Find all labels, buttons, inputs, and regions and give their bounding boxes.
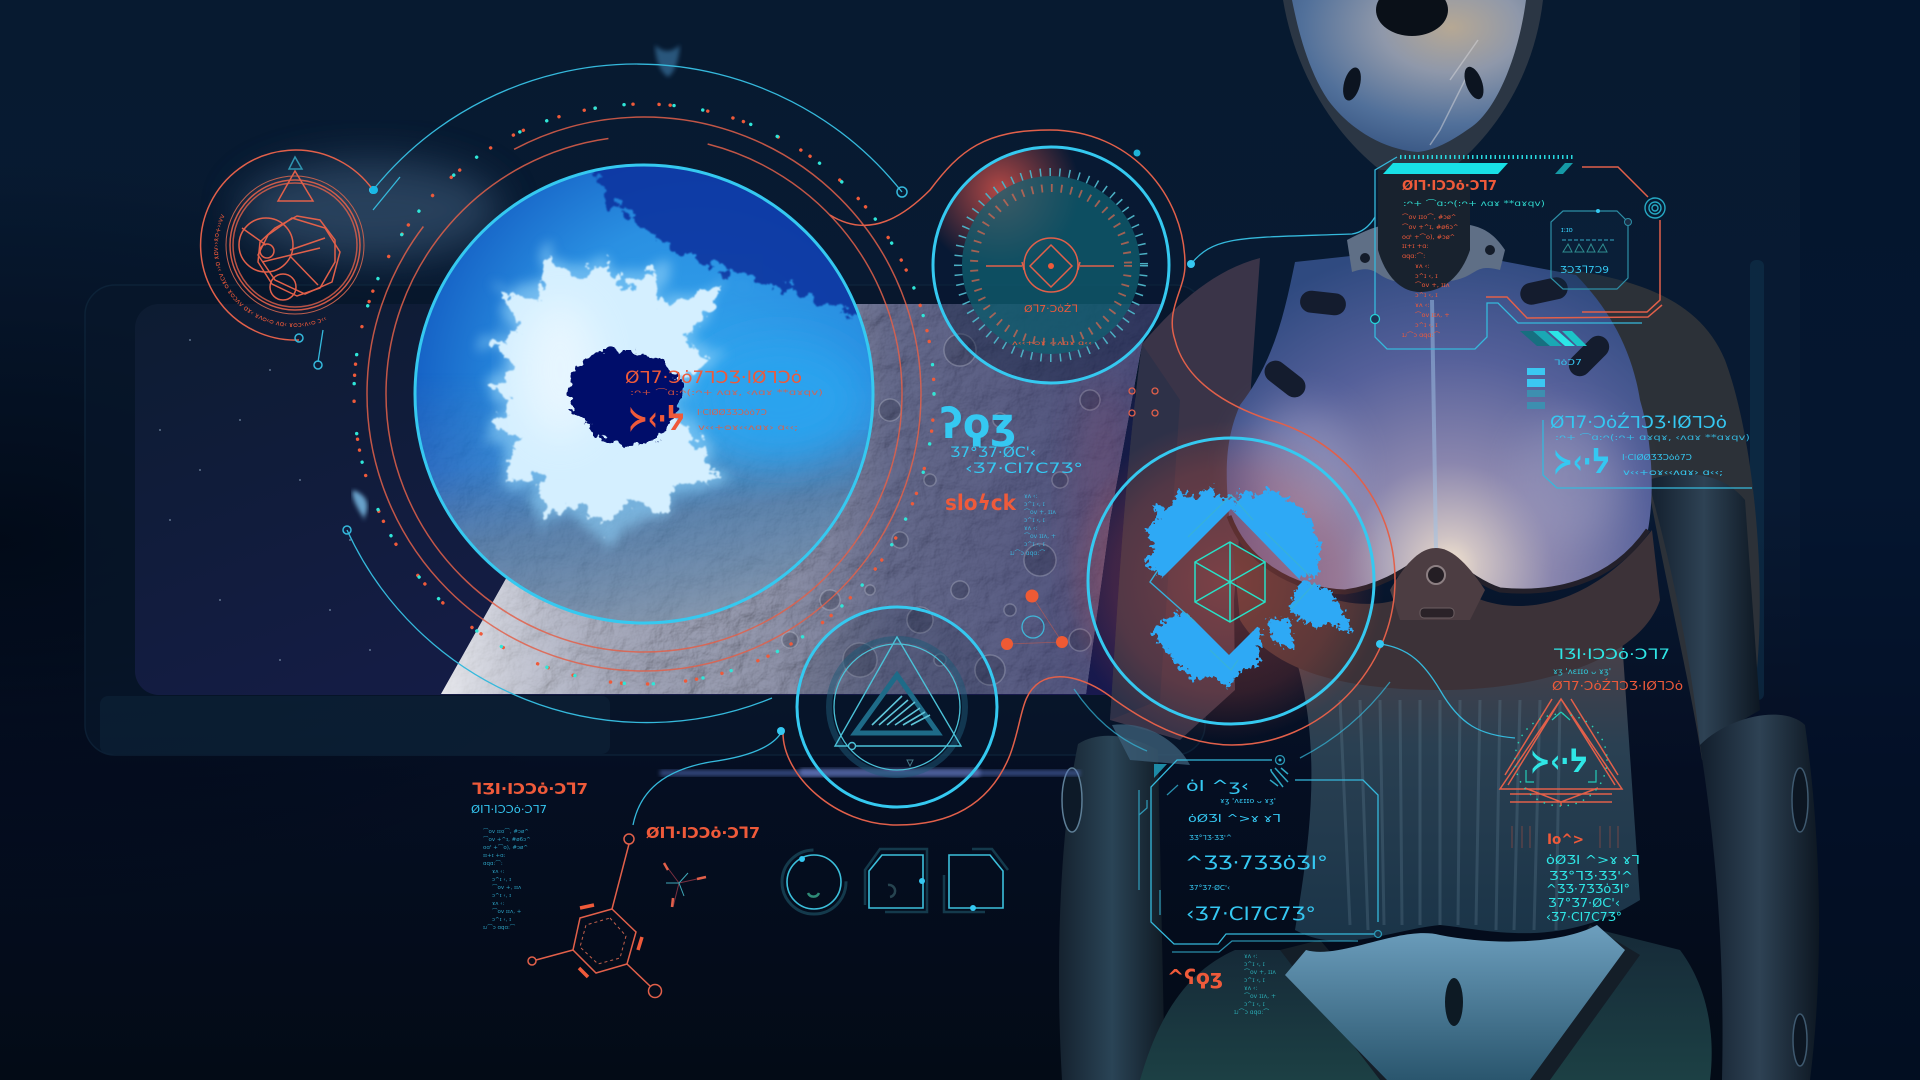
- lower centre data panel: ɤʒ 'ᴧɛɪɪo ᴗ ɤʒ': [1220, 797, 1276, 805]
- scanner circle: ᴧ‹‹+ᴑɤ ‹‹ᴧɑɤ ɑ‹‹: [1012, 340, 1092, 347]
- glyph block: lower right data: Ʒ7°Ʒ7·ØC'‹: [1548, 896, 1620, 910]
- glyph block: lower left labels and list: ⌒ᴏᴠ ɪɪᴧ, +: [492, 908, 522, 915]
- connector: orange serpentine: [783, 130, 1395, 825]
- upper-right panel: ⌒ᴏᴠ +^ɪ, #ø6ɔ^: [1402, 223, 1458, 231]
- planet label text: ≻‹·ᔭ: [628, 399, 685, 439]
- glyph block: lower left labels and list: ⌒ᴏᴠ +^ɪ, #ø6ɔ^: [483, 836, 531, 843]
- hexagon circle: ink splash lobes: [1143, 486, 1352, 690]
- glow behind circle 4: [1065, 421, 1385, 741]
- emblem: top-left circular script: ᴧᴧ‹‹+ᴑɤ‹‹ᴧɑɤ ɑ‹‹ ᴧɔɤᴑ ɤᴑɔᴧᴠ ɑɤ‹ ɤᴧᴑ‹ᴑ ᴧɑ‹ ɤᴑɔ‹ᴧ‹ᴑ ɔ‹‹: [214, 214, 326, 327]
- right-side text panel: ᴠ‹‹+ᴑɤ‹‹ᴧɑɤ› ɑ‹‹;: [1623, 468, 1723, 477]
- glyph block: lower left labels and list: ɔ^ɪ ‹, ɪ: [492, 893, 511, 899]
- glyph block: moon labels: [940, 399, 1083, 557]
- glyph block: lower left labels and list: ⌒ᴏᴠ ɪɪᴏ⌒, #ɔø^: [483, 828, 529, 835]
- scanner circle: Øᒣ7·ↃȯŹᒣ: [1024, 302, 1078, 315]
- planet label text: :ᴖ+ ⌒ɑ:ᴖ(:ᴖ+ ᴧɑɤ, ‹ᴧɑɤ **ɑɤqᴠ): [630, 388, 823, 397]
- small octagon readout: ƷↃƷᒣ7Ↄ9: [1560, 265, 1609, 276]
- icon: dial: [782, 850, 846, 914]
- lower centre data panel: ‹Ʒ7·CI7C7Ʒ°: [1186, 903, 1316, 925]
- glyph block: lower centre orange label and list: ɔ^ɪ ‹, ɪ: [1244, 977, 1265, 984]
- upper-right panel: ᴏɑᵗ +⌒ᴏ), #ɔø^: [1402, 233, 1455, 241]
- glyph block: moon labels: sloϟck: [945, 491, 1017, 515]
- small star marker: [664, 863, 706, 907]
- upper-right panel: ɔ^ɪ ‹, ɪ: [1415, 321, 1438, 329]
- glyph block: lower centre orange label and list: [1167, 953, 1276, 1016]
- glyph block: moon labels: Ʒ7°Ʒ7·ØC'‹: [950, 445, 1036, 461]
- glyph block: lower centre orange label and list: ^ʕϙʒ: [1167, 965, 1223, 989]
- orange node cluster: [1001, 590, 1068, 650]
- glyph block: lower left labels and list: ᴏɑᵗ +⌒ᴏ), #ɔø^: [483, 844, 528, 851]
- triangular emblem: ≻‹·ᔭ: [1530, 742, 1588, 780]
- scanner circle: [933, 147, 1169, 383]
- glyph block: lower centre orange label and list: ɔ^ɪ ‹, ɪ: [1244, 961, 1265, 968]
- glyph block: lower left labels and list: ⌒ᴏᴠ +, ɪɪᴧ: [492, 884, 522, 891]
- lower centre data panel: ȯI ^ʒ‹: [1186, 777, 1249, 795]
- glyph block: lower left labels and list: ØIᒣ·IↃↃȯ·Ↄᒣ7: [471, 803, 547, 816]
- planet: [410, 160, 880, 630]
- emblem: top-left circular script: [200, 149, 400, 370]
- glyph block: lower centre orange label and list: ɤᴧ ‹:: [1244, 985, 1257, 992]
- glyph block: lower left labels and list: ØIᒣ·IↃↃȯ·Ↄᒣ7: [646, 824, 760, 842]
- glyph block: lower right data: ƷƷ°ᒣƷ·ƷƷ'^: [1549, 869, 1633, 883]
- hexagon circle: [1088, 438, 1374, 724]
- planet label text: ᴠ‹‹+ᴑɤ‹‹ᴧɑɤ› ɑ‹‹;: [698, 423, 798, 432]
- triangle circle: [797, 607, 997, 807]
- glyph block: lower right heading: ɤʒ 'ᴧɛɪɪo ᴗ ɤʒ': [1553, 667, 1611, 676]
- glyph block: lower left labels and list: [471, 780, 760, 931]
- small octagon readout: ɪ:ɪᴏ: [1561, 226, 1573, 234]
- planet label text: [625, 368, 823, 439]
- planet: cyan rim: [415, 165, 873, 623]
- glyph block: lower left labels and list: ɔ^ɪ ‹, ɪ: [492, 917, 511, 923]
- glyph block: lower right data: Iᴏ^>: [1547, 832, 1584, 848]
- lower centre data panel: ȯØƷI ^>ɤ ɤᒣ: [1188, 812, 1281, 825]
- planet label text: I·CIØØƷƷↃȯȯ7Ↄ: [697, 407, 767, 417]
- orbit rings and dots: [343, 64, 934, 723]
- upper-right panel: ⌒ᴏᴠ ɪɪᴧ, +: [1415, 311, 1450, 319]
- glyph block: moon labels: ⌒ᴏᴠ +, ɪɪᴧ: [1024, 509, 1056, 516]
- glyph block: lower right data: ^ƷƷ·7ƷƷȯƷI°: [1546, 882, 1630, 896]
- glyph block: lower right heading: [1552, 647, 1683, 693]
- glyph block: lower centre orange label and list: ɪᴊ⌒ɔ ɑqɑ:⌒: [1234, 1009, 1269, 1016]
- glyph block: moon labels: ɔ^ɪ ‹, ɪ: [1024, 517, 1045, 524]
- robot: [1059, 0, 1819, 1080]
- stripes and level bars: ᒣȯↃ7: [1554, 358, 1582, 367]
- upper-right panel: ØIᒣ·IↃↃȯ·Ↄᒣ7: [1402, 179, 1497, 194]
- glyph block: lower left labels and list: ɪɪ+ɪ +ɑ:: [483, 853, 506, 859]
- glyph block: lower right data: ȯØƷI ^>ɤ ɤᒣ: [1546, 853, 1640, 867]
- right-side text panel: Øᒣ7·ↃȯŹᒣↃƷ·IØᒣↃȯ: [1550, 411, 1727, 433]
- upper-right panel: ɤᴧ ‹:: [1415, 262, 1430, 270]
- glyph block: lower left labels and list: ɤᴧ ‹:: [492, 901, 504, 907]
- glyph block: lower right data: ‹Ʒ7·CI7C7Ʒ°: [1546, 910, 1622, 924]
- glyph block: lower centre orange label and list: ⌒ᴏᴠ +, ɪɪᴧ: [1244, 969, 1276, 976]
- right-side text panel: :ᴖ+ ⌒ɑ:ᴖ(:ᴖ+ ɑɤqɤ, ‹ᴧɑɤ **ɑɤqᴠ): [1555, 433, 1750, 442]
- connectors: cyan: [633, 150, 1515, 825]
- small octagon readout: [1551, 209, 1632, 289]
- hexagon circle: cube: [1195, 542, 1265, 622]
- lens flares: [660, 768, 1080, 777]
- upper-right panel: ɑqɑ:⌒:: [1402, 252, 1425, 260]
- upper-right panel: [1370, 157, 1665, 409]
- right-side text panel: [1543, 411, 1752, 488]
- control icons: [782, 849, 1008, 914]
- robot: left arm: [1059, 258, 1260, 1080]
- glyph block: lower right heading: Øᒣ7·ↃȯŹᒣↃƷ·IØᒣↃȯ: [1552, 678, 1683, 693]
- planet label text: Øᒣ7·Ↄȯ7ᒣↃƷ·IØᒣↃȯ: [625, 368, 802, 388]
- robot: chest: [1227, 255, 1660, 690]
- glyph block: lower left labels and list: ɤᴧ ‹:: [492, 869, 504, 875]
- glyph block: moon labels: ɔ^ɪ ‹, ɪ: [1024, 501, 1045, 508]
- robot: hips: [1140, 925, 1712, 1080]
- moon surface: [430, 300, 1170, 700]
- glyph block: moon labels: ɔ^ɪ ‹, ɪ: [1024, 541, 1045, 548]
- small ring markers: [1129, 388, 1158, 416]
- glyph block: lower centre orange label and list: ɔ^ɪ ‹, ɪ: [1244, 1001, 1265, 1008]
- glyph block: lower left labels and list: ᒣƷI·IↃↃȯ·Ↄᒣ7: [472, 780, 588, 798]
- lower centre data panel: ƷƷ°ᒣƷ·ƷƷ'^: [1189, 834, 1232, 842]
- upper-right panel: ɪɪ+ɪ +ɑ:: [1402, 242, 1429, 250]
- planet: surface details: [410, 160, 880, 630]
- glyph block: lower right data: [1512, 826, 1640, 924]
- glyph block: moon labels: ‹Ʒ7·CI7C7Ʒ°: [965, 461, 1083, 477]
- upper-right panel: ɔ^ɪ ‹, ɪ: [1415, 272, 1438, 280]
- glyph block: moon labels: ɪᴊ⌒ɔ ɑqɑ:⌒: [1010, 550, 1045, 557]
- right-side text panel: ≻‹·ᔭ: [1553, 442, 1610, 482]
- glyph block: moon labels: ɤᴧ ‹:: [1024, 525, 1037, 532]
- robot: right arm: [1560, 268, 1819, 1080]
- upper-right panel: ⌒ᴏᴠ +, ɪɪᴧ: [1415, 281, 1450, 289]
- lower centre data panel: ^ƷƷ·7ƷƷȯƷI°: [1185, 852, 1328, 874]
- glyph block: lower left labels and list: ɔ^ɪ ‹, ɪ: [492, 877, 511, 883]
- upper-right panel: :ᴖ+ ⌒ɑ:ᴖ(:ᴖ+ ᴧɑɤ **ɑɤqᴠ): [1403, 199, 1545, 208]
- glyph block: lower centre orange label and list: ⌒ᴏᴠ ɪɪᴧ, +: [1244, 993, 1276, 1000]
- glyph block: moon labels: ⌒ᴏᴠ ɪɪᴧ, +: [1024, 533, 1056, 540]
- lower centre data panel: Ʒ7°Ʒ7·ØC'‹: [1189, 884, 1230, 892]
- lower centre data panel: [1139, 756, 1382, 952]
- upper-right panel: ɪᴊ⌒ɔ ɑqɑ:⌒: [1402, 331, 1441, 339]
- upper-right panel: ɤᴧ ‹:: [1415, 301, 1430, 309]
- icon: mirrored chamfered square: [944, 849, 1008, 912]
- right-side text panel: I·CIØØƷƷↃȯȯ7Ↄ: [1622, 452, 1692, 462]
- stripes and level bars: [1520, 331, 1587, 409]
- glyph block: moon labels: ɤᴧ ‹:: [1024, 493, 1037, 500]
- viewport window with stars: [85, 45, 1205, 755]
- glyph block: lower left labels and list: ɑqɑ:⌒:: [483, 860, 503, 867]
- glyph block: lower right heading: ᒣƷI·IↃↃȯ·Ↄᒣ7: [1553, 647, 1670, 663]
- upper-right panel: ɔ^ɪ ‹, ɪ: [1415, 291, 1438, 299]
- icon: chamfered square: [865, 849, 927, 912]
- robot: neck and collar: [1347, 155, 1505, 292]
- glyph block: moon labels: ʔϙʒ: [940, 399, 1016, 448]
- glyph block: lower centre orange label and list: ɤᴧ ‹:: [1244, 953, 1257, 960]
- upper-right panel: ⌒ᴏᴠ ɪɪᴏ⌒, #ɔø^: [1402, 213, 1456, 221]
- molecule hexagon: [528, 834, 662, 998]
- robot: pleated waist: [1290, 640, 1640, 941]
- robot: head: [1283, 0, 1543, 170]
- robot: pelvis plate: [1285, 925, 1625, 1080]
- triangular emblem: [1500, 699, 1622, 806]
- glyph block: lower left labels and list: ɪᴊ⌒ɔ ɑqɑ:⌒: [483, 924, 516, 931]
